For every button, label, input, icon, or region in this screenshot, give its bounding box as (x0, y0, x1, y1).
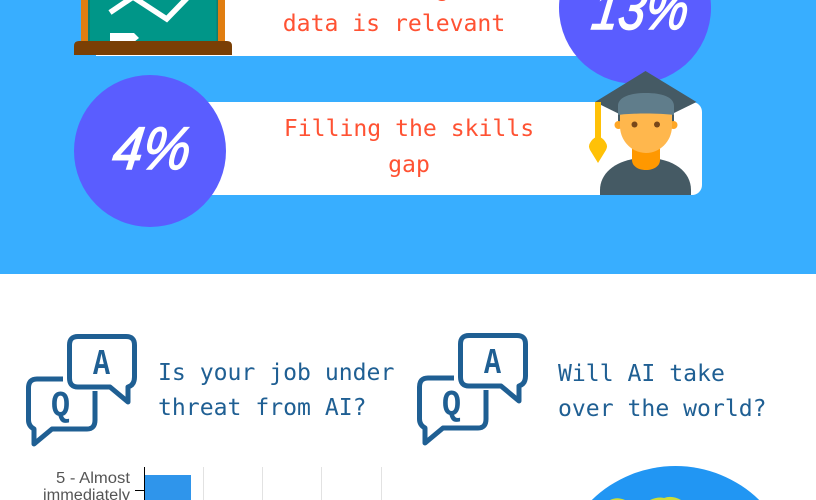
panel: white bar, skills gap (190, 102, 702, 195)
icon: graduate (589, 71, 696, 195)
text: skills gap (284, 116, 534, 178)
bar chart: job threat: 5 - Almost (56, 470, 131, 487)
icon: chalkboard (74, 0, 232, 55)
icon: Q and A bubbles, right: Q (442, 385, 461, 426)
circle: 4 percent: 4% (109, 114, 196, 182)
text: skills gap: Filling the skills (284, 116, 534, 142)
heading: AI takeover: Will AI take (558, 361, 725, 387)
icon: Q and A bubbles, right (420, 336, 526, 443)
icon: Q and A bubbles, left: A (93, 344, 110, 385)
icon: Q and A bubbles, left (28, 336, 134, 444)
heading: AI takeover: over the world? (558, 396, 767, 422)
bar chart: job threat (43, 467, 382, 500)
heading: job threat: Is your job under (158, 360, 394, 386)
icon: Q and A bubbles, left: Q (51, 386, 70, 427)
text: relevant data: data is relevant (283, 11, 505, 37)
circle: 4 percent (74, 75, 226, 227)
heading: job threat (158, 360, 394, 421)
icon: globe (592, 466, 759, 500)
text: skills gap: gap (388, 152, 430, 178)
circle: 13 percent (559, 0, 711, 84)
icon: Q and A bubbles, right: A (484, 343, 501, 384)
panel: white bar, relevant data (96, 0, 596, 56)
heading: AI takeover (558, 361, 767, 422)
panel: blue statistics background (0, 0, 816, 274)
heading: job threat: threat from AI? (158, 395, 367, 421)
